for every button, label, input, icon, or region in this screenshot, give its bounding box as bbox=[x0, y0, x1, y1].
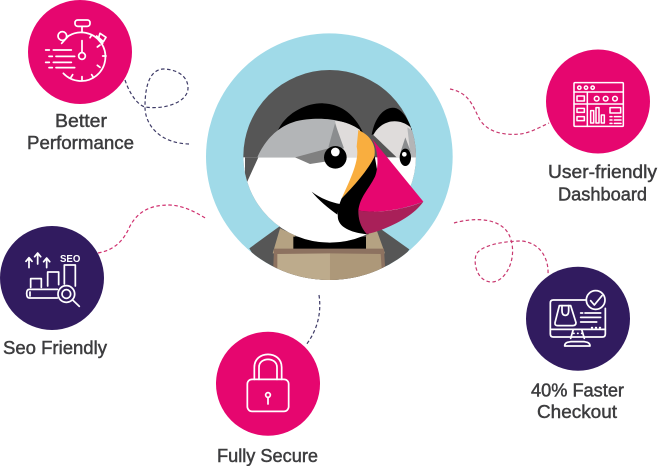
feature: better performance bbox=[27, 0, 134, 153]
connector: faster checkout bbox=[454, 220, 548, 282]
connector: seo friendly bbox=[98, 205, 207, 253]
label: Better bbox=[55, 111, 107, 131]
right brow bbox=[372, 108, 412, 135]
left brow bbox=[276, 103, 363, 135]
feature: faster checkout bbox=[526, 267, 630, 422]
label: Fully Secure bbox=[217, 446, 318, 466]
connector: fully secure bbox=[306, 295, 320, 345]
purple circle bbox=[526, 267, 630, 371]
label: Seo Friendly bbox=[3, 338, 107, 358]
label: User-friendly bbox=[548, 162, 657, 182]
icon: stopwatch bbox=[46, 20, 106, 81]
label: Performance bbox=[27, 133, 134, 153]
pink circle bbox=[216, 332, 320, 436]
icon: dashboard bbox=[574, 83, 623, 126]
pink circle bbox=[28, 0, 132, 104]
left grey face bbox=[257, 119, 360, 157]
feature: seo friendly bbox=[0, 226, 107, 358]
left eye bbox=[324, 146, 347, 169]
label bbox=[548, 162, 657, 204]
puffin body bbox=[249, 226, 409, 283]
right eye bbox=[400, 149, 411, 166]
orange cheek bbox=[342, 130, 375, 198]
icon: padlock bbox=[247, 354, 289, 411]
icon: monitor with shopping bag bbox=[550, 291, 605, 346]
black cheek bbox=[338, 156, 380, 234]
purple circle bbox=[0, 226, 104, 330]
light blue disc bbox=[206, 33, 453, 280]
label: Dashboard bbox=[558, 184, 647, 204]
feature: fully secure bbox=[216, 332, 320, 466]
right grey face bbox=[373, 121, 417, 157]
connector: user-friendly dashboard bbox=[450, 89, 549, 134]
beak upper bbox=[358, 138, 423, 212]
label bbox=[531, 380, 624, 422]
connector: better performance bbox=[125, 69, 191, 144]
label bbox=[27, 111, 134, 153]
label: 40% Faster bbox=[531, 380, 624, 400]
SEO text: SEO bbox=[60, 254, 81, 265]
feature: user-friendly dashboard bbox=[546, 50, 657, 204]
pink circle bbox=[546, 50, 650, 154]
puffin head bbox=[240, 67, 420, 247]
beak lower bbox=[358, 202, 423, 234]
smile bbox=[312, 192, 340, 215]
label: Checkout bbox=[537, 402, 617, 422]
central puffin mascot bbox=[206, 33, 453, 283]
